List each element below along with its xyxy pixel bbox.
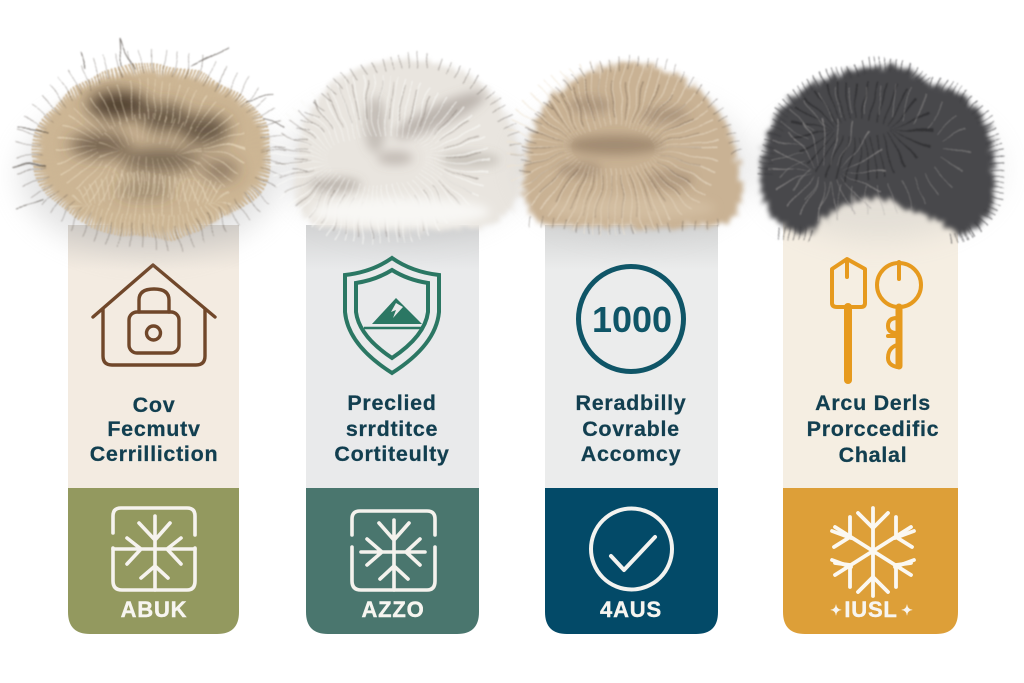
icon: check circle xyxy=(591,508,672,590)
fur: beige pom xyxy=(520,60,750,235)
fur: white and grey pom xyxy=(285,58,525,235)
footer: olive badge xyxy=(68,488,239,634)
icon: snowflake xyxy=(832,508,914,596)
footer: green badge xyxy=(306,488,479,634)
label: IUSL: IUSL xyxy=(844,597,898,622)
heading: specific text xyxy=(807,391,939,467)
label: AZZO: AZZO xyxy=(361,597,425,622)
panel: beige certification card xyxy=(68,225,239,634)
heading: readability text: Reradbilly xyxy=(576,391,686,415)
footer: amber badge xyxy=(783,488,958,634)
fur: dark grey pom xyxy=(760,64,1000,240)
heading: specific text: Chalal xyxy=(839,443,907,467)
heading: certification text: Fecmutv xyxy=(107,417,201,441)
icon: house with padlock xyxy=(93,265,215,365)
heading: readability text xyxy=(576,391,686,466)
label: ABUK: ABUK xyxy=(121,597,187,622)
heading: specific text: Arcu Derls xyxy=(815,391,931,415)
label: 4AUS: 4AUS xyxy=(600,597,662,622)
heading: durability text xyxy=(334,391,450,466)
icon: two orange keys xyxy=(832,259,921,380)
panel: grey 1000 card xyxy=(545,225,718,634)
fur strands xyxy=(15,38,285,225)
heading: certification text: Cerrilliction xyxy=(90,442,218,466)
footer: navy badge xyxy=(545,488,718,634)
heading: readability text: Accomcy xyxy=(581,442,681,466)
icon: framed snowflake xyxy=(113,508,195,590)
heading: certification text: Cov xyxy=(133,393,175,417)
panel: cream keys card xyxy=(783,192,958,634)
heading: certification text xyxy=(90,393,218,466)
heading: specific text: Prorccedific xyxy=(807,417,939,441)
label: IUSL: ✦ xyxy=(901,602,913,618)
icon: shield with mountain xyxy=(345,258,439,373)
label: IUSL xyxy=(830,597,913,622)
heading: readability text: Covrable xyxy=(582,417,680,441)
heading: durability text: Preclied xyxy=(347,391,437,415)
icon: 1000 circle: 1000 xyxy=(592,299,672,340)
heading: durability text: srrdtitce xyxy=(346,417,438,441)
icon: 1000 circle xyxy=(578,266,684,372)
heading: durability text: Cortiteulty xyxy=(334,442,450,466)
label: IUSL: ✦ xyxy=(830,602,842,618)
panel: grey durability card xyxy=(306,225,479,634)
icon: framed snowflake xyxy=(352,511,435,590)
fur: tan and brown pom xyxy=(15,38,285,253)
